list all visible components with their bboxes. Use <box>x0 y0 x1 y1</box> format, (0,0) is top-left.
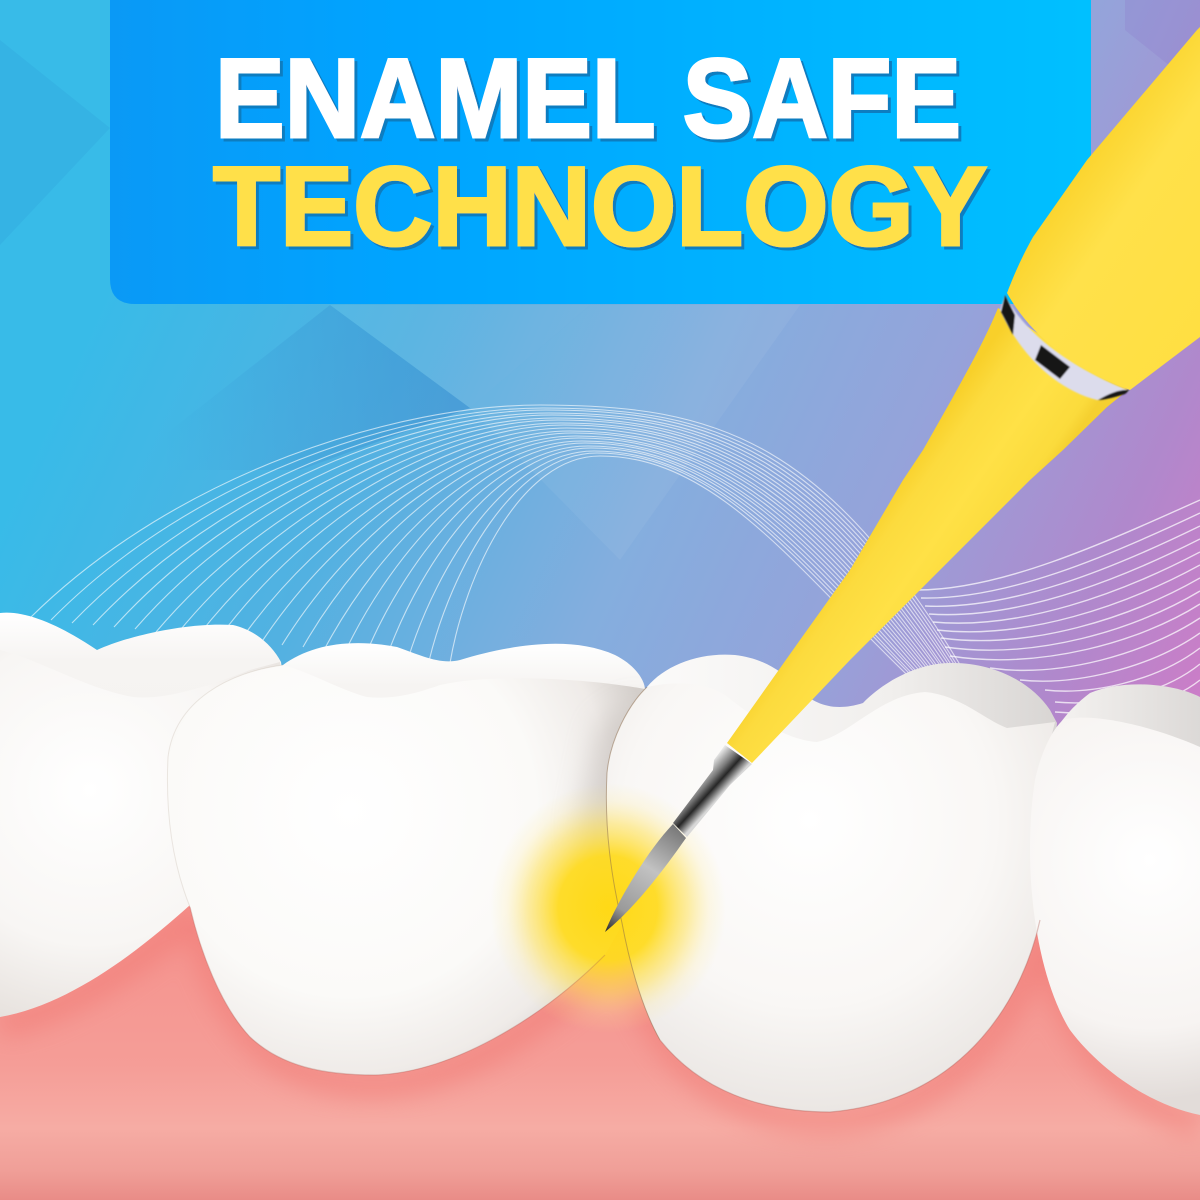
tooth: center left <box>167 643 650 1075</box>
gum <box>0 900 1200 1200</box>
far right tooth front face <box>1030 718 1200 1115</box>
yellow glow <box>490 783 726 1033</box>
far right tooth back crown <box>1035 684 1200 850</box>
second wave lines on right <box>917 500 1200 713</box>
title line 2: TECHNOLOGY <box>213 144 987 269</box>
tooth: far left <box>0 613 300 1017</box>
background geometric facets <box>0 0 1200 560</box>
far left tooth back crown <box>0 613 300 1017</box>
ring silver band <box>1000 295 1130 400</box>
center left tooth back crown <box>283 643 645 1000</box>
tooth contact edges <box>167 665 1040 1112</box>
ring black right end <box>1098 390 1130 400</box>
tool handle <box>1007 27 1200 390</box>
gum contact shadow <box>0 915 1200 1125</box>
ring black left end <box>1001 295 1015 335</box>
ring black centre patch <box>1035 345 1070 379</box>
scaler tip <box>605 824 686 932</box>
scaler tool <box>605 27 1200 932</box>
center left tooth side shading <box>580 700 640 925</box>
metal ring <box>1000 295 1130 400</box>
metal collar <box>673 745 752 837</box>
far left tooth front face <box>0 650 300 1017</box>
tool cone <box>727 308 1128 763</box>
tooth: center right <box>606 655 1057 1112</box>
tooth: far right <box>1030 684 1200 1115</box>
center left tooth front face <box>167 665 650 1075</box>
title banner <box>110 0 1091 304</box>
center right tooth back crown <box>647 655 1057 900</box>
title <box>213 36 987 269</box>
wave line pattern <box>30 405 975 690</box>
center right tooth front face <box>606 683 1055 1112</box>
title line 1: ENAMEL SAFE <box>215 36 961 161</box>
